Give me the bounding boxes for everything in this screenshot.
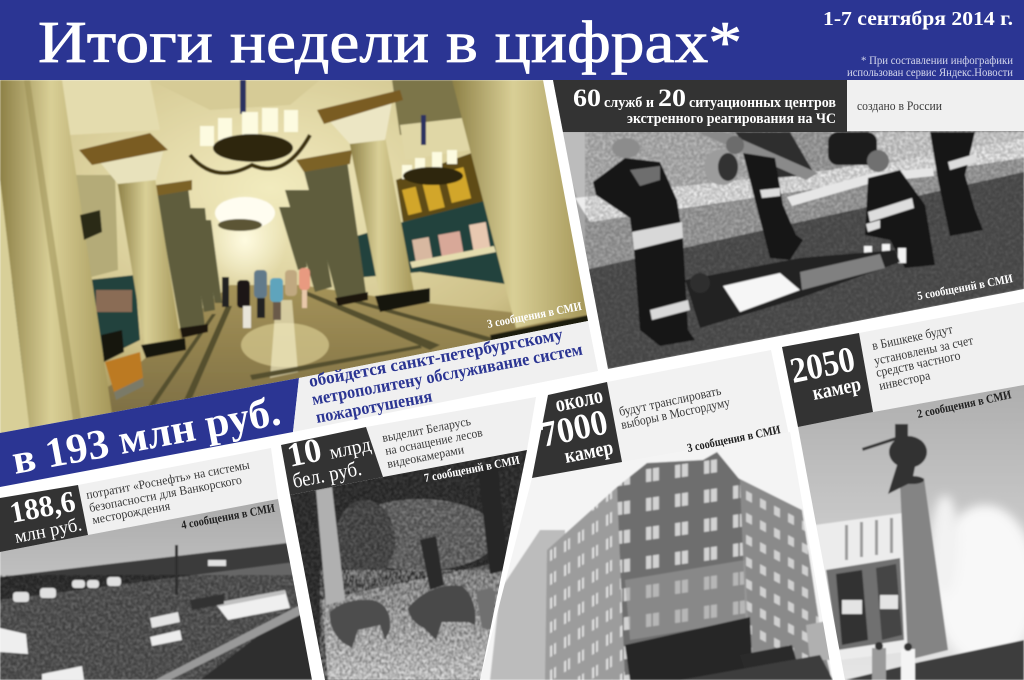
Bishkek amount: 2050 — [787, 339, 858, 391]
far-left building — [490, 530, 565, 680]
emergency mentions: 5 сообщений в СМИ — [916, 271, 1014, 303]
panel: emergency services — [553, 80, 1024, 380]
firefighter 2 — [726, 136, 803, 260]
Bishkek description: инвестора — [878, 367, 932, 393]
panel: Belarus: млрд — [327, 434, 373, 464]
light caption — [532, 350, 790, 490]
Rosneft description: безопасности для Ванкорского — [88, 473, 243, 515]
title banner — [0, 0, 1024, 80]
right big column — [452, 80, 588, 328]
Moscow description: выборы в Мосгордуму — [620, 394, 732, 432]
source note: использован сервис Яндекс.Новости — [847, 67, 1013, 79]
panel: metro figure — [0, 299, 598, 487]
far glow — [212, 219, 280, 281]
light caption — [847, 80, 1024, 131]
right wing — [738, 478, 832, 680]
light caption block — [293, 321, 598, 432]
panel: Bishkek: камер — [810, 372, 863, 405]
emergency heading: 60 — [573, 85, 601, 112]
emergency heading: 20 — [658, 85, 686, 112]
source note — [847, 55, 1013, 79]
Moscow description: будут транслировать — [618, 383, 722, 419]
Rosneft description: потратит «Роснефть» на системы — [85, 458, 251, 502]
granite columns — [155, 160, 366, 332]
dark heading block — [553, 80, 847, 132]
light caption — [366, 397, 536, 477]
floor — [108, 284, 570, 412]
Belarus description: выделит Беларусь — [381, 414, 472, 445]
metro description: метрополитену обслуживание систем — [310, 339, 584, 409]
second column — [79, 133, 186, 358]
third column — [317, 90, 430, 312]
corner tower — [617, 452, 748, 680]
metro description — [307, 324, 584, 427]
panel: Rosneft — [0, 448, 330, 680]
Rosneft mentions: 4 сообщения в СМИ — [180, 501, 276, 532]
light caption — [78, 448, 278, 535]
metro description: пожаротушения — [314, 386, 434, 427]
Bishkek description: установлены за счет — [873, 332, 975, 368]
Belarus description: на оснащение лесов — [384, 425, 484, 458]
dark figure block — [281, 427, 383, 495]
panel: Belarus: бел. руб. — [290, 456, 364, 493]
firefighter 1 — [593, 138, 695, 346]
Rosneft description: месторождения — [91, 499, 171, 527]
panel: Belarus — [281, 397, 536, 680]
monument photo — [790, 380, 1024, 680]
metro amount: в 193 млн руб. — [8, 389, 284, 484]
rescue photo — [553, 80, 1024, 380]
icon: chandeliers — [190, 80, 463, 231]
emergency heading: ситуационных центров — [689, 95, 836, 111]
left train — [88, 275, 140, 360]
Moscow mentions: 3 сообщения в СМИ — [686, 422, 782, 455]
panel: Moscow Duma: 7000 — [536, 402, 611, 455]
dark figure block — [532, 382, 622, 478]
panel: metro photo — [0, 80, 600, 445]
Rosneft amount: 188,6 — [7, 485, 78, 530]
bison — [330, 585, 496, 648]
metro mentions: 3 сообщения в СМИ — [486, 299, 583, 331]
emergency caption: создано в России — [857, 99, 942, 113]
oil field photo — [0, 490, 330, 680]
title: Итоги недели в цифрах* — [38, 9, 742, 75]
metro description: обойдется санкт-петербургскому — [307, 324, 565, 391]
firefighter 4 — [930, 132, 983, 236]
ground floor — [625, 617, 753, 680]
Belarus amount: 10 — [284, 432, 325, 475]
dark figure block — [0, 485, 88, 552]
light caption — [859, 302, 1024, 412]
panel: Moscow Duma — [480, 350, 840, 680]
icon: platform clock — [80, 210, 102, 240]
Bishkek description — [871, 321, 975, 393]
Moscow amount: около — [553, 382, 605, 417]
Bishkek description: средств частного — [875, 347, 962, 380]
Bishkek mentions: 2 сообщения в СМИ — [916, 387, 1013, 421]
left wing — [545, 487, 630, 680]
emergency heading: экстренного реагирования на ЧС — [627, 111, 836, 127]
panel: Bishkek — [782, 302, 1024, 680]
emergency heading — [573, 85, 836, 127]
Bishkek description: в Бишкеке будут — [871, 321, 954, 353]
Belarus mentions: 7 сообщений в СМИ — [423, 453, 521, 485]
blue label — [0, 378, 299, 487]
date: 1-7 сентября 2014 г. — [823, 8, 1013, 30]
building photo — [480, 430, 840, 680]
firefighter 3 — [864, 150, 935, 268]
Belarus description: видеокамерами — [386, 442, 465, 471]
lying patient — [685, 250, 900, 328]
forest photo — [285, 445, 535, 680]
back wall, right train — [395, 152, 484, 223]
people — [222, 268, 310, 328]
panel: Moscow Duma: камер — [562, 435, 615, 468]
emergency heading: служб и — [604, 95, 654, 111]
Belarus description — [381, 414, 484, 471]
source note: * При составлении инфографики — [861, 55, 1013, 67]
icon: horseman statue — [862, 424, 927, 494]
panel: Rosneft: млн руб. — [13, 514, 84, 548]
dark figure block — [782, 333, 873, 427]
Rosneft description — [85, 458, 251, 527]
